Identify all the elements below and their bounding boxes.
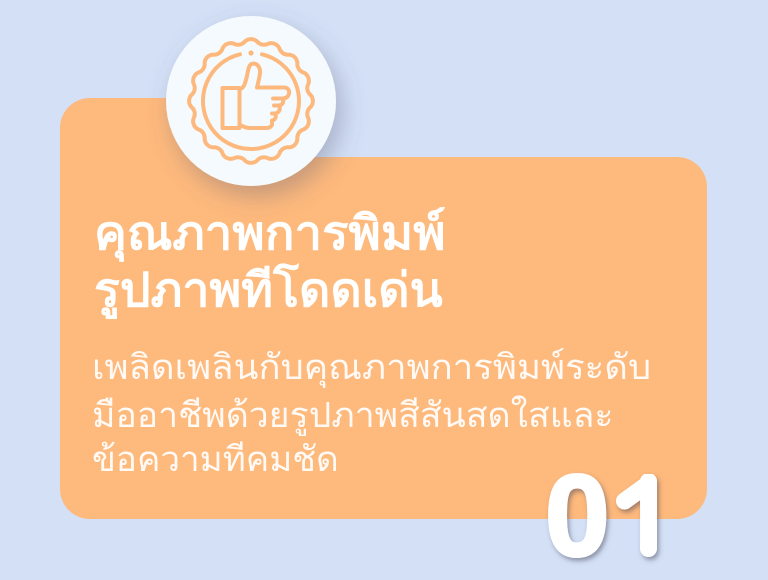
heading: รูปภาพทีโดดเด่น [94,263,443,316]
heading: คุณภาพการพิมพ์ [94,206,446,259]
text block [92,348,651,479]
text block: มืออาชีพด้วยรูปภาพสีสันสดใสและ [92,396,614,435]
text block: ข้อความทีคมชัด [92,440,339,479]
text block: เพลิดเพลินกับคุณภาพการพิมพ์ระดับ [92,348,651,387]
number 01: 0 [545,450,610,580]
heading [94,206,446,319]
number 01 [547,473,662,564]
number 01: 1 [614,450,679,580]
